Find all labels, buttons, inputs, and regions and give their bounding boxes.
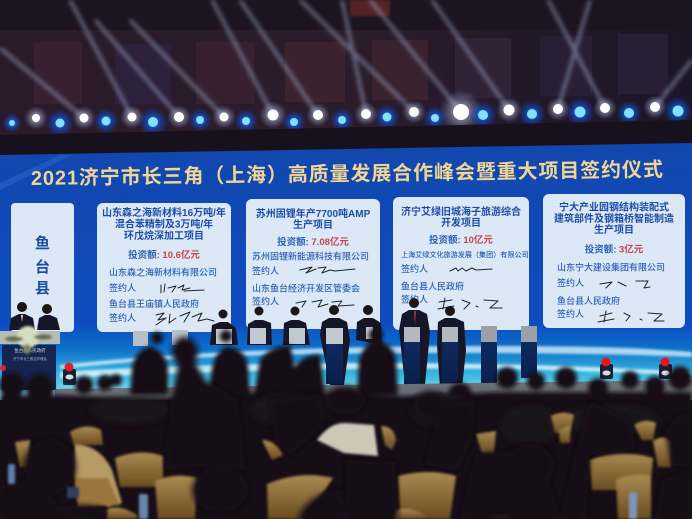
panel: project 3: 签约人 — [401, 263, 428, 274]
panel: project 3: 开发项目 — [441, 216, 481, 229]
panel: project 3: 鱼台县人民政府 — [401, 280, 464, 292]
signer 5 — [356, 305, 382, 345]
host: woman — [37, 304, 60, 330]
panel: project 1 — [97, 203, 231, 332]
signature — [450, 268, 492, 271]
panel: project 4: 生产项目 — [594, 223, 634, 236]
panel: project 1: 山东森之海新材料有限公司 — [109, 266, 217, 278]
LED screen — [0, 143, 692, 400]
water bottles — [8, 464, 637, 519]
truss — [0, 120, 692, 158]
signer 6 — [399, 298, 430, 385]
panel: project 1: 混合苯精制及3万吨/年 — [115, 218, 213, 230]
panel: project 1: 山东森之海新材料16万吨/年 — [102, 206, 226, 219]
panel: project 4: 山东宁大建设集团有限公司 — [557, 262, 665, 272]
foreground heads — [0, 337, 692, 519]
signature — [296, 300, 354, 307]
signer 1 — [210, 310, 238, 345]
panel: project 1: 环戊烷深加工项目 — [124, 229, 204, 242]
panel: project 4: 建筑部件及钢箱桥智能制造 — [554, 212, 674, 225]
panel: county: 鱼 — [35, 234, 50, 252]
panel: project 3: 投资额: 10亿元 — [429, 234, 493, 246]
panel: project 4 — [543, 194, 685, 328]
flowers — [5, 326, 52, 354]
panel: county — [11, 203, 74, 332]
lights row — [2, 90, 692, 137]
panel: project 3: 上海艾绿文化旅游发展（集团）有限公司 — [401, 250, 529, 259]
title: 2021济宁市长三角（上海）高质量发展合作峰会暨重大项目签约仪式 — [31, 157, 663, 190]
panel: project 4: 投资额: 3亿元 — [585, 244, 644, 256]
stage floor — [55, 380, 692, 400]
stage light beams — [0, 0, 692, 118]
signature — [600, 281, 650, 288]
moving head lamps — [0, 358, 672, 385]
signature — [598, 311, 664, 322]
signers on stage — [9, 298, 466, 388]
audience — [0, 328, 692, 519]
mid-tone crowd — [90, 392, 660, 445]
panel: project 2: 签约人 — [252, 265, 279, 276]
panel: project 3: 签约人 — [401, 294, 428, 304]
panel: project 2 — [246, 199, 380, 329]
signature — [300, 267, 355, 273]
panel: project 1: 投资额: 10.6亿元 — [128, 249, 200, 261]
signer 2 — [247, 306, 272, 345]
panel: project 1: 鱼台县王庙镇人民政府 — [109, 298, 199, 309]
host: man — [9, 302, 35, 330]
panel: project 3: 济宁艾绿旧城海子旅游综合 — [401, 205, 521, 218]
podiums — [133, 326, 537, 386]
panel: county: 台 — [35, 258, 50, 276]
panel: project 2: 苏州固锂新能源科技有限公司 — [252, 250, 369, 262]
signature — [438, 298, 502, 309]
signature — [161, 284, 204, 293]
beige shirts — [74, 423, 378, 507]
panel: project 2: 投资额: 7.08亿元 — [277, 236, 349, 248]
panel: project 3 — [393, 197, 529, 330]
ceiling backdrop — [0, 0, 692, 160]
panel: project 2: 签约人 — [252, 296, 279, 306]
signer 4 — [320, 305, 350, 385]
lectern with flowers — [0, 326, 60, 390]
panel: project 1: 签约人 — [109, 312, 136, 323]
panel: project 4: 签约人 — [557, 308, 584, 319]
chairs — [15, 413, 671, 519]
panel: project 4: 鱼台县人民政府 — [557, 295, 620, 306]
panel: project 4: 签约人 — [557, 277, 584, 288]
dark crowd mass — [0, 328, 692, 519]
panel: project 1: 签约人 — [109, 282, 136, 293]
lectern with flowers: 鱼台县人民政府 — [14, 347, 46, 354]
lectern with flowers: 济宁市长三角合作峰会 — [13, 356, 48, 361]
signer 7 — [437, 306, 466, 388]
panel: project 4: 宁大产业园钢结构装配式 — [559, 200, 669, 214]
panel: county: 县 — [35, 280, 50, 297]
panel: project 2: 生产项目 — [293, 218, 333, 231]
signer 3 — [283, 306, 310, 345]
panel: project 2: 山东鱼台经济开发区管委会 — [252, 282, 360, 294]
panel: project 2: 苏州固锂年产7700吨AMP — [256, 207, 371, 220]
signature — [156, 312, 214, 325]
